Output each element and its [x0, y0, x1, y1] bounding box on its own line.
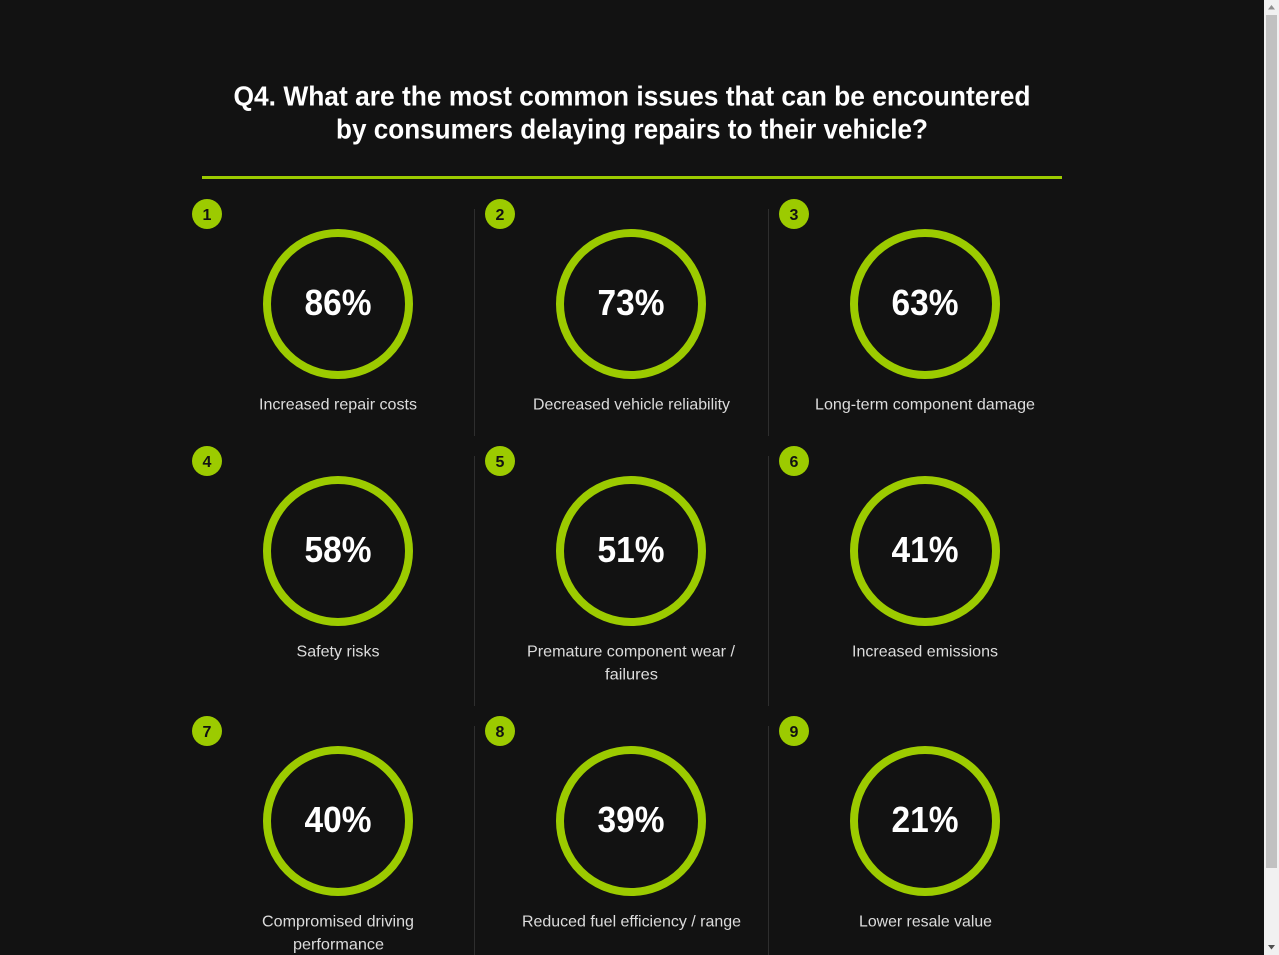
- item 7: compromised driving performance: 40%: [304, 799, 372, 840]
- title: by consumers delaying repairs to their vehicle?: [336, 114, 928, 144]
- item 1: increased repair costs: Increased repair costs: [259, 396, 417, 414]
- title underline: [202, 176, 1062, 179]
- item 6: increased emissions: [779, 446, 998, 660]
- item 7: compromised driving performance: [192, 716, 414, 954]
- item 8: reduced fuel efficiency / range: [485, 716, 741, 930]
- item 6: increased emissions: 6: [790, 454, 799, 471]
- item 6: increased emissions: 41%: [892, 529, 958, 570]
- title: [234, 80, 1030, 144]
- item 1: increased repair costs: 86%: [304, 282, 372, 323]
- item 5: premature component wear / failures: failures: [605, 666, 658, 684]
- item 5: premature component wear / failures: 51%: [598, 529, 664, 570]
- item 4: safety risks: 58%: [304, 529, 372, 570]
- item 2: decreased vehicle reliability: Decreased vehicle reliability: [533, 396, 730, 414]
- item 1: increased repair costs: [192, 199, 417, 414]
- item 8: reduced fuel efficiency / range: 8: [496, 724, 505, 741]
- item 3: long-term component damage: Long-term component damage: [815, 396, 1035, 414]
- item 5: premature component wear / failures: 5: [496, 454, 505, 471]
- item 3: long-term component damage: [779, 199, 1035, 414]
- item 7: compromised driving performance: Compromised driving: [262, 914, 414, 930]
- item 8: reduced fuel efficiency / range: Reduced fuel efficiency / range: [522, 914, 741, 930]
- item 9: lower resale value: 9: [790, 724, 799, 741]
- item 4: safety risks: Safety risks: [296, 644, 380, 660]
- item 3: long-term component damage: 3: [790, 207, 799, 224]
- item 3: long-term component damage: 63%: [892, 282, 958, 323]
- item 5: premature component wear / failures: Premature component wear /: [527, 644, 736, 660]
- item 9: lower resale value: 21%: [892, 799, 958, 840]
- item 4: safety risks: 4: [203, 454, 212, 471]
- item 7: compromised driving performance: performance: [293, 936, 384, 954]
- item 2: decreased vehicle reliability: 2: [496, 207, 505, 224]
- item 2: decreased vehicle reliability: 73%: [598, 282, 664, 323]
- item 1: increased repair costs: 1: [203, 207, 212, 224]
- item 2: decreased vehicle reliability: [485, 199, 730, 414]
- scrollbar: [1264, 0, 1279, 955]
- title: Q4. What are the most common issues that can be encountered: [234, 80, 1030, 112]
- item 4: safety risks: [192, 446, 409, 660]
- item 9: lower resale value: Lower resale value: [859, 914, 992, 930]
- item 5: premature component wear / failures: [485, 446, 736, 684]
- item 8: reduced fuel efficiency / range: 39%: [598, 799, 664, 840]
- item 9: lower resale value: [779, 716, 996, 930]
- item 6: increased emissions: Increased emissions: [852, 644, 998, 660]
- item 7: compromised driving performance: 7: [203, 724, 212, 741]
